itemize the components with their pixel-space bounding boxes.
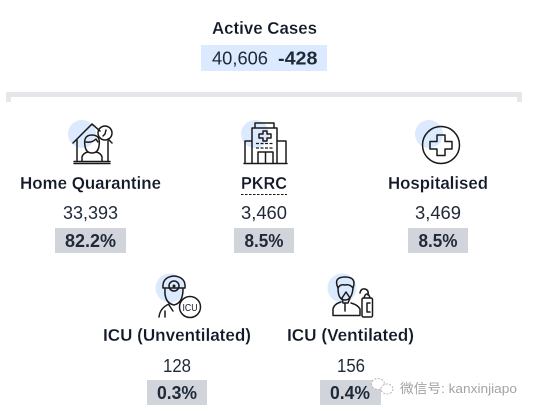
title: Active Cases: [212, 18, 317, 38]
icon: doctor with ICU badge: [156, 274, 200, 318]
icon: house with person and clock: [68, 120, 112, 164]
share badge: [55, 228, 126, 253]
panel: PKRC: [234, 120, 294, 253]
value: 3,469: [415, 203, 461, 223]
icon: wechat: [372, 378, 393, 394]
share badge: 0.4%: [330, 382, 370, 403]
share badge: [147, 380, 207, 405]
active cases total: 40,606: [212, 48, 268, 68]
panel: ICU ventilated: [287, 274, 414, 405]
icon: doctor with ICU badge: ICU: [182, 302, 198, 314]
share badge: 8.5%: [244, 230, 284, 251]
label: PKRC: [241, 173, 287, 193]
value: 3,460: [241, 203, 287, 223]
panel: hospitalised: [388, 120, 488, 253]
value: 128: [163, 356, 191, 376]
active cases total: -428: [278, 48, 318, 68]
label: ICU (Unventilated): [103, 325, 251, 345]
label: Home Quarantine: [20, 173, 161, 193]
icon: hospital building: [241, 120, 287, 164]
share badge: 8.5%: [418, 230, 458, 251]
panel: ICU unventilated: [103, 274, 251, 405]
watermark: [372, 378, 517, 396]
active cases total: [201, 45, 327, 71]
label: ICU (Ventilated): [287, 325, 414, 345]
panel: home quarantine: [20, 120, 161, 253]
icon: patient with oxygen tank: [328, 274, 372, 317]
value: 156: [337, 356, 365, 376]
label: Hospitalised: [388, 173, 488, 193]
share badge: 0.3%: [157, 382, 197, 403]
icon: medical cross in circle: [415, 120, 460, 164]
bracket connector: [6, 92, 522, 102]
share badge: 82.2%: [65, 230, 116, 251]
value: 33,393: [63, 203, 118, 223]
watermark: 微信号: kanxinjiapo: [400, 381, 517, 396]
dashed underline: [241, 194, 287, 196]
